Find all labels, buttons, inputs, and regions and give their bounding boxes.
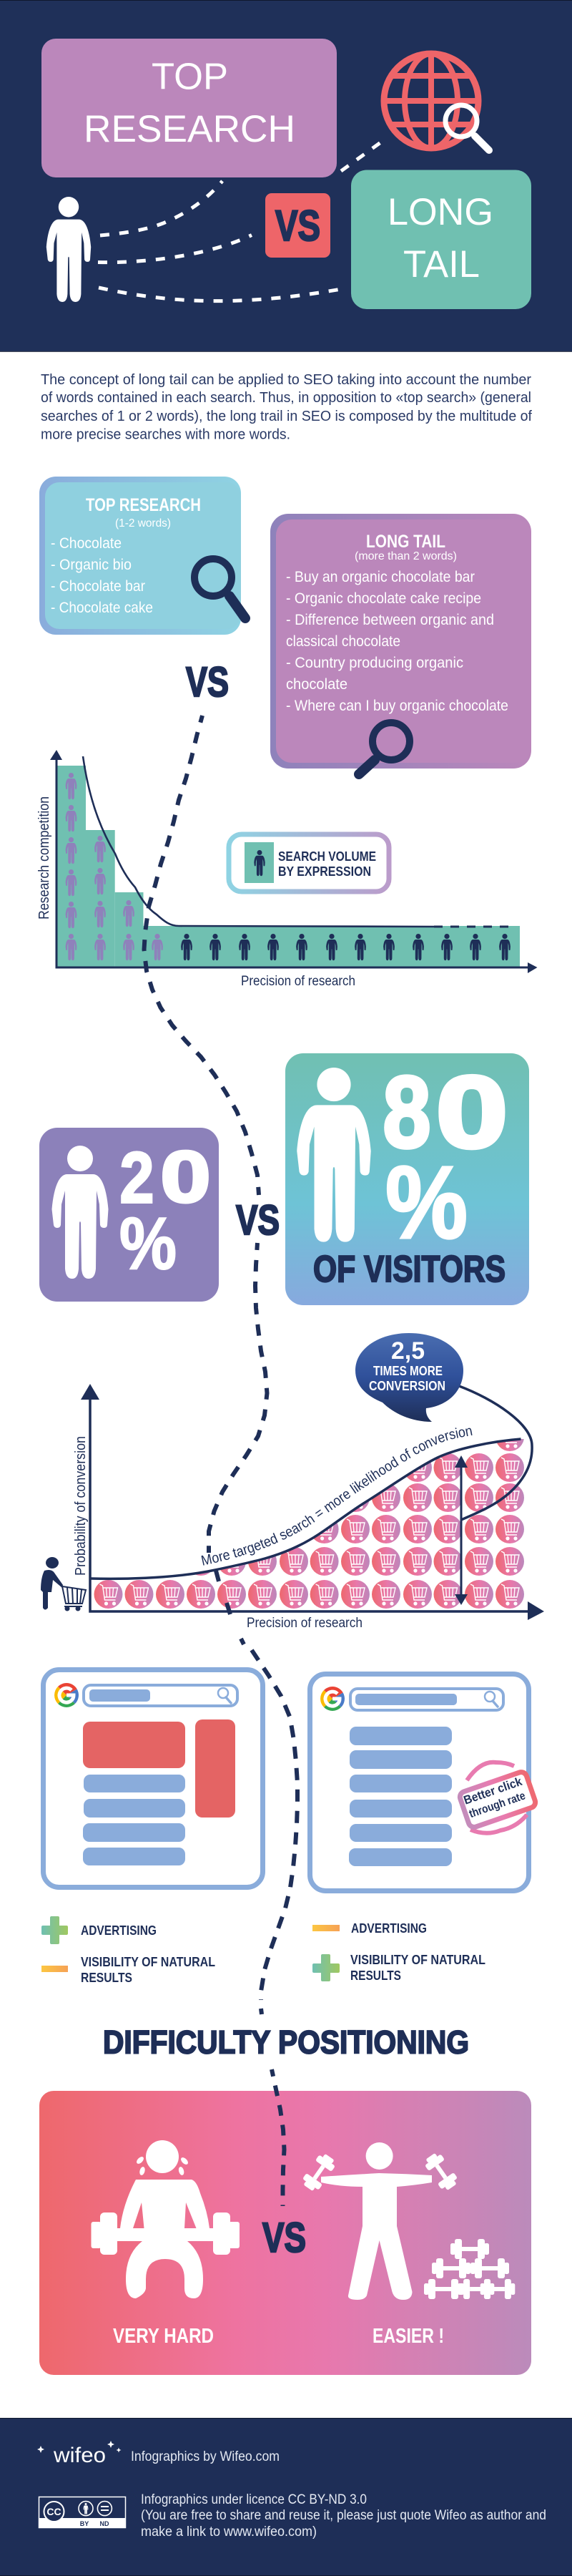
icon: person [46,197,91,302]
figure: 20: 0 [160,1138,210,1218]
panel: long tail: - Where can I buy organic chocolate [286,698,508,714]
cc by-nd badge [39,2497,126,2527]
panel: top research [39,477,245,635]
badge: better click through rate: through rate [468,1790,527,1820]
callout bubble [355,1333,463,1422]
vs label: VS [262,2215,306,2261]
panel: 20%: % [119,1202,177,1284]
vs label: VS [236,1197,280,1244]
panel: 80% of visitors: OF VISITORS [313,1249,506,1290]
curve label: More targeted search = more likelihood of conversion [202,1428,472,1566]
header box: top research: TOP [152,56,228,97]
figure: 80: 0 [436,1055,508,1169]
axes [50,750,538,973]
icon: shopper with cart [41,1557,86,1611]
panel: long tail: (more than 2 words) [355,550,457,562]
legend: left browser [41,1916,215,1985]
legend: right browser: RESULTS [350,1968,401,1983]
result bars [349,1727,452,1866]
header box: long tail: TAIL [403,243,480,286]
result bars [83,1775,185,1865]
figure: 20: 2 [120,1138,154,1218]
panel: top research: TOP RESEARCH [86,495,201,515]
browser: advertising heavy results [43,1670,263,1888]
panel: top research: - Chocolate bar [51,578,145,595]
legend: left browser: RESULTS [81,1971,132,1985]
cart bubbles [94,1423,524,1609]
search bar [350,1689,503,1710]
panel: top research: - Chocolate [51,535,122,552]
header box: long tail: LONG [388,191,493,233]
green volume bars [57,766,520,967]
conversion curve [90,1439,521,1579]
caption: easier: EASIER ! [373,2325,444,2348]
header box: long tail [351,170,531,309]
panel: top research: (1-2 words) [115,517,171,530]
legend: right browser: VISIBILITY OF NATURAL [350,1953,485,1967]
search bar [84,1685,237,1706]
icon: minus [312,1925,340,1931]
icon: minus [41,1966,68,1972]
icon: plus [312,1954,340,1981]
licence text [141,2492,546,2540]
panel: long tail: - Organic chocolate cake recipe [286,590,481,607]
competition curve [83,756,434,927]
licence text: (You are free to share and reuse it, please just quote Wifeo as author and [141,2508,546,2523]
callout bubble: CONVERSION [369,1379,445,1393]
header band [0,0,572,352]
callout connector [459,1386,532,1520]
purple people [66,773,163,960]
wifeo logo: wifeo [53,2444,106,2467]
callout bubble: TIMES MORE [373,1364,443,1378]
icon: weightlifter [92,2140,240,2298]
browser: natural results [310,1674,537,1890]
white dashed connectors [98,140,385,301]
x axis label: Precision of research [241,974,355,989]
wifeo logo [37,2441,122,2467]
main dashed path [144,716,297,2206]
panel: long tail: - Difference between organic and [286,612,494,628]
x axis label: Precision of research [247,1616,363,1631]
icon: dumbbell pile [424,2239,515,2299]
licence text: make a link to www.wifeo.com) [141,2524,317,2540]
y axis label: Probability of conversion [73,1436,89,1576]
vs badge: VS [275,202,320,250]
panel: difficulty [39,2091,531,2375]
intro paragraph: more precise searches with more words. [41,426,290,442]
icon: person with dumbbells [300,2142,460,2300]
icon: magnifier [359,723,410,774]
vs label: VS [186,659,229,706]
caption: very hard: VERY HARD [113,2325,214,2348]
cc by-nd badge: ND [100,2520,109,2527]
header box: top research [41,39,337,177]
badge: better click through rate [458,1762,537,1833]
panel: long tail: classical chocolate [286,633,400,650]
navy people [181,934,511,960]
chart: search volume by precision [36,750,538,989]
figure: 20 [120,1138,210,1218]
panel: long tail: - Buy an organic chocolate bar [286,569,475,585]
intro paragraph: The concept of long tail can be applied to SEO taking into account the number [41,372,531,388]
icon: magnifier [194,559,245,618]
panel: long tail [270,514,531,774]
panel: long tail: - Country producing organic [286,655,463,671]
legend: search volume: SEARCH VOLUME [278,849,376,864]
vs badge [265,193,330,258]
panel: top research: - Organic bio [51,557,132,573]
dashed curve end [434,926,509,927]
legend: left browser: ADVERTISING [81,1923,157,1938]
heading: difficulty positioning: DIFFICULTY POSITIONING [103,2024,469,2061]
licence text: Infographics under licence CC BY-ND 3.0 [141,2492,367,2507]
panel: long tail: LONG TAIL [366,532,445,552]
legend: right browser [312,1921,485,1983]
panel: long tail: chocolate [286,676,347,693]
legend: right browser: ADVERTISING [351,1921,427,1936]
intro paragraph: of words contained in each search. Thus, in opposition to «top search» (general [41,390,531,406]
panel: 80% of visitors [285,1053,529,1305]
panel: top research: - Chocolate cake [51,600,153,616]
icon: plus [41,1916,68,1944]
y axis label: Research competition [36,796,52,919]
badge: better click through rate: Better click [462,1775,524,1807]
intro paragraph: searches of 1 or 2 words), the long trail in SEO is composed by the multitude of [41,409,532,424]
panel: 20% [39,1128,219,1302]
icon: globe with magnifier [384,54,489,150]
legend: search volume [229,834,389,892]
figure: 80: 8 [383,1055,430,1169]
legend: search volume: BY EXPRESSION [278,864,371,879]
icon: google logo [54,1683,79,1707]
ad blocks [83,1719,235,1818]
figure: 80 [383,1055,508,1169]
header box: top research: RESEARCH [84,108,295,150]
cc by-nd badge: CC [46,2506,61,2517]
footer [0,2418,572,2576]
axes [81,1384,544,1620]
intro paragraph [41,372,532,442]
legend: left browser: VISIBILITY OF NATURAL [81,1955,215,1969]
chart: conversion probability [41,1333,544,1631]
callout bubble: 2,5 [391,1337,425,1365]
double arrow [455,1455,468,1605]
cc by-nd badge: BY [80,2520,89,2527]
panel: 80% of visitors: % [385,1145,468,1260]
icon: google logo [320,1687,345,1711]
credit: Infographics by Wifeo.com [131,2449,280,2464]
